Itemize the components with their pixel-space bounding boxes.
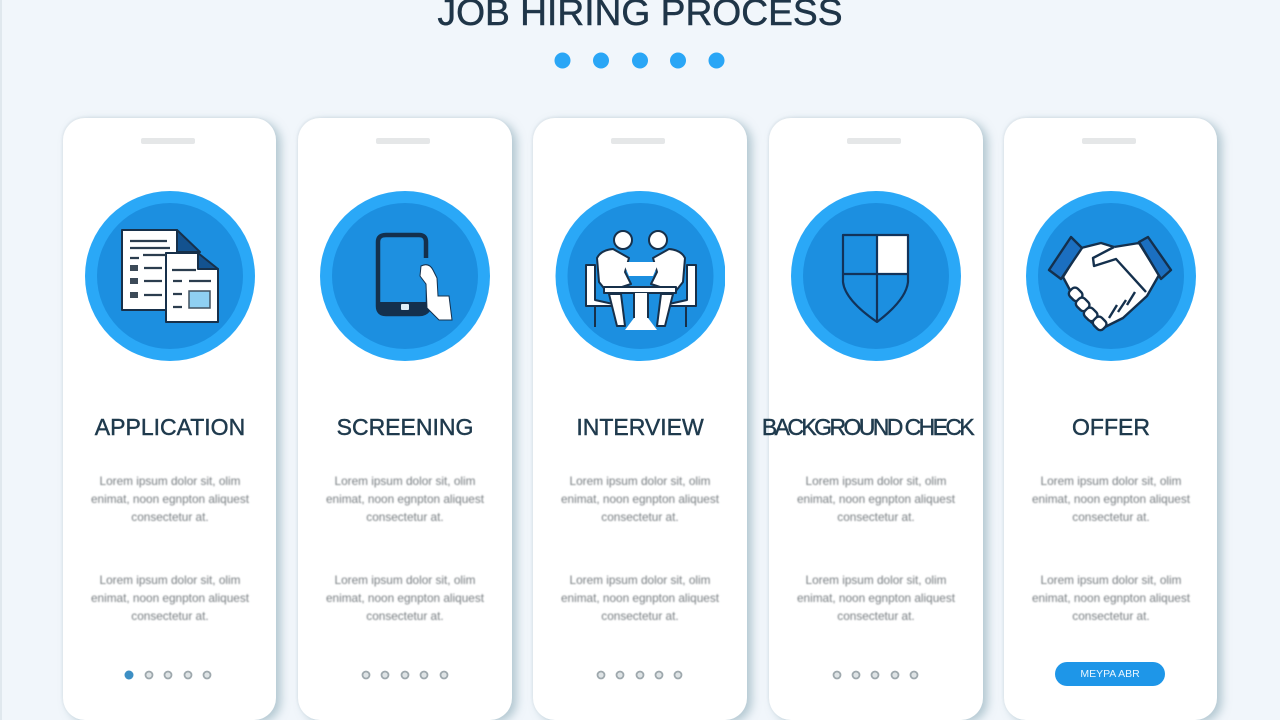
- text block 2: enimat, noon egnpton aliquest: [91, 591, 249, 605]
- text block 2: consectetur at.: [837, 609, 915, 623]
- heading: SCREENING: [337, 414, 473, 440]
- icon: shield: [791, 191, 961, 361]
- text block 2: Lorem ipsum dolor sit, olim: [570, 573, 710, 587]
- text block 2: Lorem ipsum dolor sit, olim: [1041, 573, 1181, 587]
- text block 2: enimat, noon egnpton aliquest: [1032, 591, 1190, 605]
- text block 2: consectetur at.: [601, 609, 679, 623]
- text block 1: consectetur at.: [837, 510, 915, 524]
- panel: interview: [533, 118, 747, 720]
- text block 1: consectetur at.: [366, 510, 444, 524]
- text block 1: Lorem ipsum dolor sit, olim: [806, 474, 946, 488]
- icon: two people at a table: [556, 191, 725, 361]
- text block 1: consectetur at.: [601, 510, 679, 524]
- text block 2: enimat, noon egnpton aliquest: [326, 591, 484, 605]
- heading: INTERVIEW: [576, 414, 704, 440]
- pagination dots: [596, 670, 682, 680]
- text block 1: enimat, noon egnpton aliquest: [326, 492, 484, 506]
- text block 2: consectetur at.: [1072, 609, 1150, 623]
- text block 1: enimat, noon egnpton aliquest: [1032, 492, 1190, 506]
- text block 2: Lorem ipsum dolor sit, olim: [335, 573, 475, 587]
- text block 1: Lorem ipsum dolor sit, olim: [335, 474, 475, 488]
- speaker bar: [376, 138, 430, 144]
- icon: phone with hand: [320, 191, 490, 361]
- speaker bar: [141, 138, 195, 144]
- text block 2: Lorem ipsum dolor sit, olim: [806, 573, 946, 587]
- text block 1: Lorem ipsum dolor sit, olim: [100, 474, 240, 488]
- speaker bar: [1082, 138, 1136, 144]
- icon: documents: [85, 191, 255, 361]
- text block 1: enimat, noon egnpton aliquest: [797, 492, 955, 506]
- pagination dots: [124, 670, 212, 680]
- heading: BACKGROUND CHECK: [762, 414, 972, 440]
- speaker bar: [611, 138, 665, 144]
- text block 2: [326, 573, 484, 623]
- heading: OFFER: [1072, 414, 1150, 440]
- text block 2: [796, 573, 956, 623]
- text block 1: [1032, 474, 1190, 524]
- pagination dots: [832, 670, 918, 680]
- text block 1: Lorem ipsum dolor sit, olim: [1041, 474, 1181, 488]
- text block 2: enimat, noon egnpton aliquest: [561, 591, 719, 605]
- text block 1: [560, 474, 720, 524]
- text block 1: [90, 474, 250, 524]
- text block 1: [796, 474, 956, 524]
- panel: application: [63, 118, 276, 720]
- text block 2: [90, 573, 250, 623]
- panel: offer: [1004, 118, 1217, 720]
- text block 2: consectetur at.: [366, 609, 444, 623]
- speaker bar: [847, 138, 901, 144]
- icon: handshake: [1026, 191, 1196, 361]
- text block 1: Lorem ipsum dolor sit, olim: [570, 474, 710, 488]
- text block 2: [1032, 573, 1190, 623]
- text block 2: [560, 573, 720, 623]
- text block 1: consectetur at.: [131, 510, 209, 524]
- heading: APPLICATION: [95, 414, 245, 440]
- button: [1055, 662, 1165, 686]
- button: MEYPA ABR: [1080, 668, 1140, 680]
- text block 1: [326, 474, 484, 524]
- text block 2: consectetur at.: [131, 609, 209, 623]
- text block 1: enimat, noon egnpton aliquest: [561, 492, 719, 506]
- title step dots: [554, 52, 724, 68]
- text block 1: consectetur at.: [1072, 510, 1150, 524]
- text block 2: Lorem ipsum dolor sit, olim: [100, 573, 240, 587]
- panel: screening: [298, 118, 512, 720]
- text block 2: enimat, noon egnpton aliquest: [797, 591, 955, 605]
- text block 1: enimat, noon egnpton aliquest: [91, 492, 249, 506]
- pagination dots: [362, 670, 448, 680]
- panel: background check: [769, 118, 983, 720]
